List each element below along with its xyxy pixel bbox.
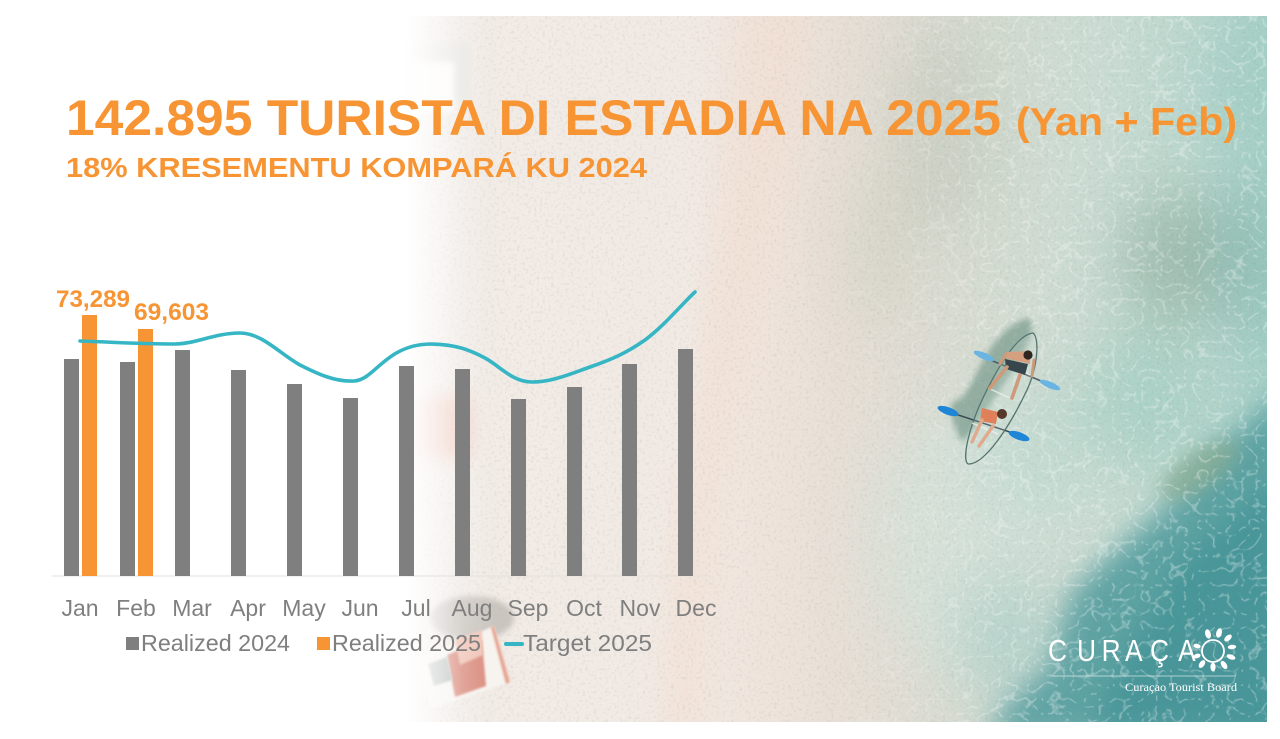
month labels: Aug xyxy=(452,595,492,621)
logo: Curaçao Tourist Board xyxy=(1048,628,1237,694)
month labels: Jan xyxy=(61,595,99,621)
month labels: Jun xyxy=(341,595,379,621)
faded boats on the beach xyxy=(425,48,516,700)
hull xyxy=(966,333,1037,464)
month labels: Apr xyxy=(230,595,266,621)
month labels: Sep xyxy=(508,595,548,621)
bars: realized 2025 xyxy=(82,315,153,576)
title: 142.895 TURISTA DI ESTADIA NA 2025 xyxy=(66,90,1001,146)
month labels: Jul xyxy=(401,595,431,621)
data labels: 69,603 xyxy=(134,299,209,326)
month labels: Nov xyxy=(620,595,661,621)
legend: Target 2025 xyxy=(523,630,652,656)
legend: Realized 2024 xyxy=(141,630,290,656)
boat: middle xyxy=(425,394,476,460)
boat: top xyxy=(426,48,466,112)
bars: realized 2024 xyxy=(64,349,693,576)
water ripples xyxy=(870,16,1267,722)
deep water xyxy=(985,390,1280,739)
kayak with two paddlers xyxy=(936,318,1061,464)
month labels: Oct xyxy=(566,595,602,621)
data labels xyxy=(56,286,209,326)
legend: Realized 2025 xyxy=(332,630,481,656)
month labels: Mar xyxy=(172,595,212,621)
month labels: Dec xyxy=(676,595,716,621)
month labels xyxy=(61,595,716,621)
pink wet-sand band xyxy=(672,374,715,722)
logo: Curaçao Tourist Board: Curaçao Tourist Board xyxy=(1125,680,1237,694)
month labels: May xyxy=(282,595,326,621)
line: target 2025 xyxy=(80,292,695,382)
paddles xyxy=(936,349,1061,443)
lower paddler xyxy=(972,408,1007,446)
title: (Yan + Feb) xyxy=(1016,101,1237,144)
subtitle: 18% KRESEMENTU KOMPARÁ KU 2024 xyxy=(66,152,647,183)
data labels: 73,289 xyxy=(56,286,130,313)
sand grain xyxy=(400,16,1267,722)
bar chart: monthly tourists xyxy=(52,286,716,621)
logo: Curaçao Tourist Board: CURAÇA xyxy=(1048,634,1196,669)
background photo: beach and sea xyxy=(400,0,1280,739)
upper paddler xyxy=(990,350,1034,398)
month labels: Feb xyxy=(116,595,156,621)
icon: sun xyxy=(1193,628,1236,671)
legend xyxy=(126,630,652,656)
boat: bottom xyxy=(428,594,516,700)
